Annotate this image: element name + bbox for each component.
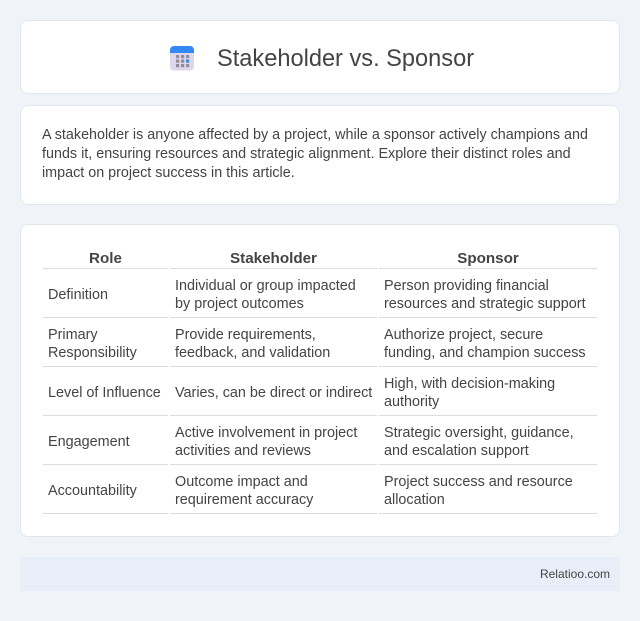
intro text: A stakeholder is anyone affected by a project, while a sponsor actively champions and	[42, 127, 588, 143]
header panel	[20, 20, 620, 94]
row: definition: Definition	[48, 287, 108, 303]
sponsor accountability: allocation	[384, 492, 445, 508]
comparison table panel	[20, 224, 620, 537]
sponsor influence: High, with decision-making	[384, 376, 555, 392]
row: primary responsibility: Primary	[48, 327, 98, 343]
sponsor engagement: and escalation support	[384, 443, 529, 459]
stakeholder responsibility	[175, 327, 330, 361]
footer bar	[20, 557, 620, 591]
row: primary responsibility: Responsibility	[48, 345, 137, 361]
sponsor accountability	[384, 474, 573, 508]
stakeholder influence: Varies, can be direct or indirect	[175, 385, 372, 401]
title: Stakeholder vs. Sponsor	[217, 46, 474, 72]
row: accountability: Accountability	[48, 483, 137, 499]
table heading: stakeholder: Stakeholder	[230, 250, 317, 267]
stakeholder accountability: Outcome impact and	[175, 474, 308, 490]
stakeholder accountability: requirement accuracy	[175, 492, 313, 508]
sponsor engagement	[384, 425, 574, 459]
stakeholder responsibility: feedback, and validation	[175, 345, 330, 361]
sponsor responsibility: Authorize project, secure	[384, 327, 543, 343]
row: engagement: Engagement	[48, 434, 130, 450]
row: level of influence: Level of Influence	[48, 385, 161, 401]
stakeholder responsibility: Provide requirements,	[175, 327, 316, 343]
sponsor influence	[384, 376, 555, 410]
stakeholder engagement: activities and reviews	[175, 443, 311, 459]
stakeholder definition	[175, 278, 356, 312]
intro text	[42, 127, 588, 181]
stakeholder engagement	[175, 425, 358, 459]
intro text panel	[20, 105, 620, 205]
table heading: role: Role	[89, 250, 122, 267]
intro text: funds it, ensuring resources and strategic alignment. Explore their distinct roles and	[42, 146, 571, 162]
sponsor responsibility: funding, and champion success	[384, 345, 586, 361]
sponsor definition: resources and strategic support	[384, 296, 586, 312]
stakeholder accountability	[175, 474, 314, 508]
sponsor definition	[384, 278, 586, 312]
sponsor definition: Person providing financial	[384, 278, 549, 294]
stakeholder definition: by project outcomes	[175, 296, 304, 312]
sponsor engagement: Strategic oversight, guidance,	[384, 425, 574, 441]
stakeholder definition: Individual or group impacted	[175, 278, 356, 294]
icon: calendar	[170, 46, 194, 70]
sponsor accountability: Project success and resource	[384, 474, 573, 490]
intro text: impact on project success in this article.	[42, 165, 295, 181]
row: primary responsibility	[48, 327, 137, 361]
sponsor responsibility	[384, 327, 586, 361]
table heading: sponsor: Sponsor	[457, 250, 519, 267]
footer brand: Relatioo.com	[540, 567, 610, 581]
stakeholder engagement: Active involvement in project	[175, 425, 357, 441]
sponsor influence: authority	[384, 394, 439, 410]
